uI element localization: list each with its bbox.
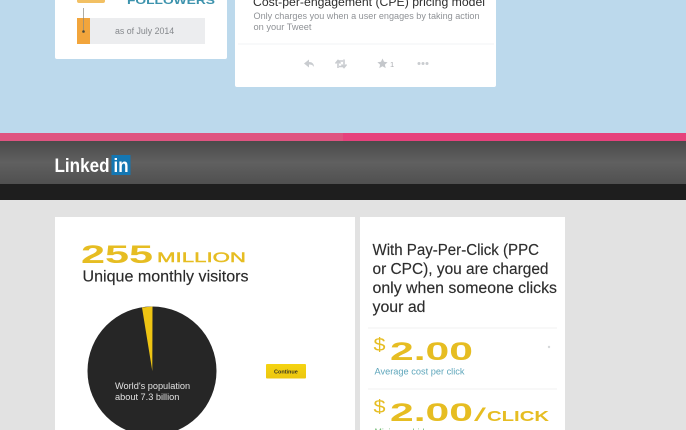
ppc description: only when someone clicks [372,280,557,297]
icon: star with count: 1 [390,60,394,69]
tweet description [254,11,480,32]
panel: visitors card [55,217,355,430]
big stat: 255 million: MILLION [157,250,246,265]
icon: star with count [377,58,394,69]
ppc description: or CPC), you are charged [372,261,548,278]
big stat: 255 million [81,241,246,269]
ppc description: With Pay-Per-Click (PPC [372,242,539,259]
stat: minimum bid: CLICK [487,408,549,425]
big stat: 255 million: 255 [81,241,153,269]
panel: pay-per-click card [360,217,565,430]
tweet description: Only charges you when a user engages by taking action [254,11,480,21]
stat: minimum bid: 2.00 [390,399,473,427]
continue button [266,364,306,378]
panel: followers card [55,0,227,59]
panel: linkedin header [0,141,686,200]
followers number fragment [77,0,105,3]
stat: average cost per click: $ [374,335,386,355]
continue button: Continue [274,370,298,376]
ppc description [372,242,557,316]
panel: tweet card [235,0,496,87]
icon: reply [304,60,314,68]
date bar: as of July 2014 [115,26,174,36]
pie chart: World's population [115,381,190,391]
pie chart: about 7.3 billion [115,392,179,402]
stat: average cost per click: Average cost per click [374,366,465,376]
pink divider band [0,133,686,141]
linkedin logo: Linked [54,156,110,177]
stat: minimum bid [374,397,549,430]
stat: minimum bid: $ [374,397,386,417]
linkedin logo: in [114,156,128,177]
date bar [77,8,205,44]
tweet description: on your Tweet [254,22,312,32]
icon: retweet [336,60,346,68]
ppc description: your ad [372,299,426,316]
panel: twitter section background [0,0,686,133]
icon: more dots [418,62,428,65]
stat: average cost per click: 2.00 [390,338,473,366]
pie chart [88,306,216,430]
panel: linkedin section background [0,200,686,430]
stat: average cost per click [374,335,550,376]
subheading: Unique monthly visitors [82,268,249,286]
stat: minimum bid: / [474,405,486,425]
